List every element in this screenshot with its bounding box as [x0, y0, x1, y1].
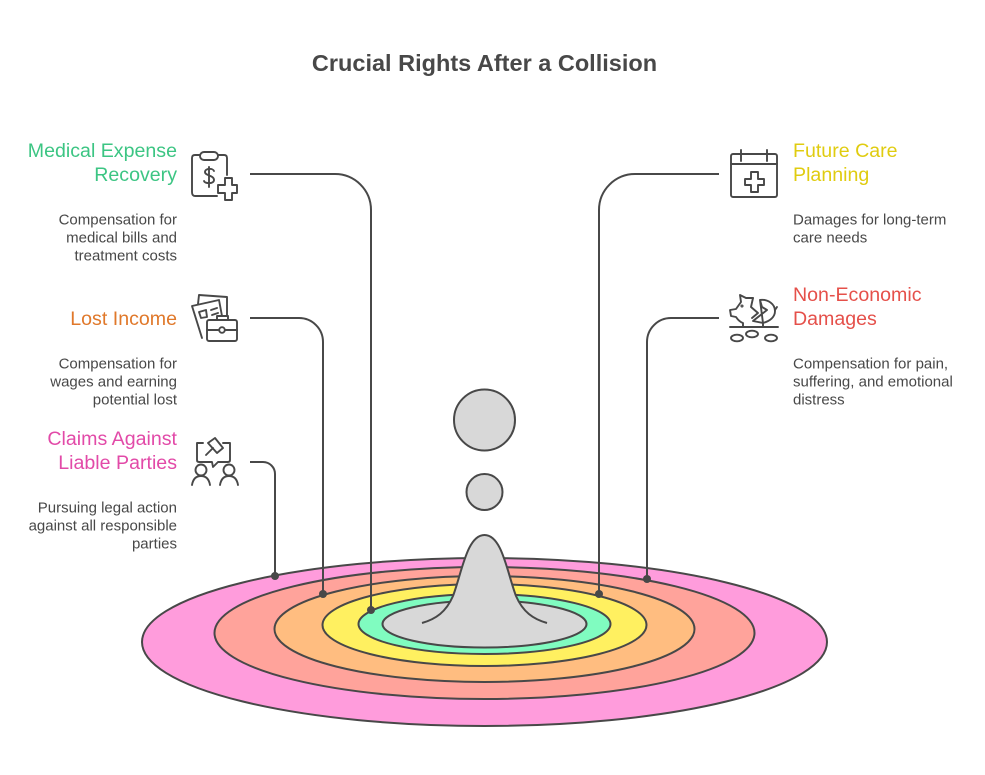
heading: lost income: Lost Income [70, 308, 177, 330]
description: non-economic damages: suffering, and emotional [793, 374, 953, 390]
description: medical expense recovery: Compensation for [59, 212, 177, 228]
ring: lost income [274, 576, 694, 682]
description: claims against liable parties: against all responsible [29, 518, 177, 534]
panel: medical expense recovery [28, 140, 177, 264]
description: lost income: Compensation for [59, 356, 177, 372]
icon: calendar with medical cross [731, 150, 777, 197]
panel: non-economic damages [793, 284, 953, 408]
concentric ripple chart [142, 390, 827, 726]
connector: lost income [250, 318, 327, 598]
ring: center [382, 600, 586, 648]
droplet small [466, 474, 502, 510]
description: lost income: potential lost [93, 392, 178, 408]
heading: medical expense recovery: Recovery [94, 164, 177, 186]
connector: non-economic damages [643, 318, 719, 583]
ring: future care planning [322, 584, 646, 666]
heading: non-economic damages: Damages [793, 308, 877, 330]
description: future care planning: care needs [793, 230, 867, 246]
panel: claims against liable parties [29, 428, 178, 552]
description: claims against liable parties: Pursuing legal action [38, 500, 177, 516]
description: lost income: wages and earning [49, 374, 177, 390]
description: non-economic damages: distress [793, 392, 845, 408]
droplet large [454, 390, 515, 450]
ring: non-economic damages [214, 567, 754, 699]
heading: claims against liable parties: Liable Parties [58, 452, 177, 474]
description: medical expense recovery: medical bills and [66, 230, 177, 246]
description: future care planning: Damages for long-term [793, 212, 946, 228]
heading: future care planning: Future Care [793, 140, 898, 162]
panel: lost income [49, 308, 178, 408]
connector: future care planning [595, 174, 719, 598]
description: medical expense recovery: treatment costs [74, 248, 177, 264]
icon: papers and briefcase [192, 295, 237, 341]
connector: claims against liable parties [250, 462, 279, 580]
heading: future care planning: Planning [793, 164, 869, 186]
icon: broken piggy bank with coins [730, 295, 778, 341]
icon: gavel in speech bubble with two people [192, 438, 238, 485]
splash peak [422, 535, 547, 630]
heading: claims against liable parties: Claims Against [47, 428, 178, 450]
panel: future care planning [793, 140, 946, 246]
icon: clipboard with dollar and medical cross [192, 152, 237, 200]
description: claims against liable parties: parties [132, 536, 177, 552]
connector: medical expense recovery [250, 174, 375, 614]
heading: non-economic damages: Non-Economic [793, 284, 922, 306]
ring: medical expense recovery [358, 594, 610, 654]
ring: claims against liable parties [142, 558, 827, 726]
title: Crucial Rights After a Collision [312, 50, 657, 76]
heading: medical expense recovery: Medical Expense [28, 140, 177, 162]
description: non-economic damages: Compensation for pain, [793, 356, 948, 372]
